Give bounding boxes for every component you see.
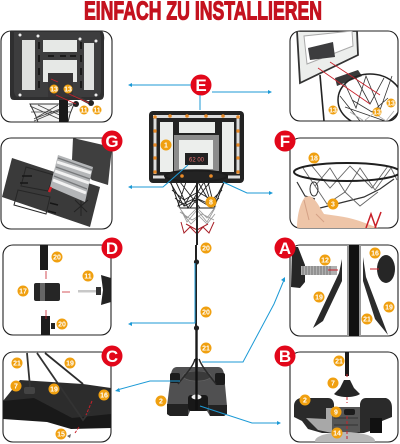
part labels xyxy=(156,140,216,406)
label: parts 21, 7, 2, 9, 14: 7 xyxy=(331,380,335,388)
label: parts 13, 13, 13: 13 xyxy=(373,110,381,116)
part labels: 2 xyxy=(159,398,163,406)
label: parts 13, 13, 13: 13 xyxy=(329,108,337,114)
label: parts 21, 7, 2, 9, 14: 21 xyxy=(335,358,343,366)
label: parts 12, 19, 16, 19, 21: 19 xyxy=(385,304,393,312)
label: parts 21, 7, 2, 9, 14 xyxy=(300,356,344,438)
label: parts 12, 19, 16, 19, 21: 21 xyxy=(363,316,371,324)
label: parts 20, 17, 11, 20: 20 xyxy=(53,254,61,262)
badge B: B xyxy=(279,347,291,366)
panel B: base assembly xyxy=(290,352,398,444)
hoop rim xyxy=(165,170,227,182)
panel: hoop mounting xyxy=(290,31,400,126)
label: parts 13, 13, 11, 11: 13 xyxy=(50,86,58,94)
light strip xyxy=(153,114,240,178)
label: parts 18, 3 xyxy=(308,152,338,210)
panel A: brace bolt xyxy=(290,245,398,336)
part labels: 1 xyxy=(164,142,168,150)
badge F: F xyxy=(280,132,290,151)
panel D: pole connector xyxy=(3,245,111,336)
panel F: net attachment xyxy=(290,138,400,228)
label: parts 13, 13, 11, 11: 11 xyxy=(93,108,101,114)
label: parts 21, 7, 2, 9, 14: 9 xyxy=(334,410,338,416)
label: parts 13, 13, 13: 13 xyxy=(387,100,395,108)
label: parts 20, 17, 11, 20: 11 xyxy=(84,274,92,280)
label: parts 21, 19, 7, 19, 16, 15 xyxy=(10,358,110,440)
panel: backboard rear xyxy=(1,31,112,122)
label: parts 13, 13, 11, 11: 11 xyxy=(80,108,88,114)
label: parts 13, 13, 11, 11: 13 xyxy=(64,86,72,94)
label: parts 21, 19, 7, 19, 16, 15: 15 xyxy=(57,432,65,438)
arrows: callout connectors xyxy=(115,83,285,425)
badge D: D xyxy=(106,239,118,258)
badge D xyxy=(102,238,122,258)
badge E xyxy=(190,74,212,96)
badge F xyxy=(274,130,296,152)
label: parts 12, 19, 16, 19, 21: 19 xyxy=(315,294,323,302)
label: parts 20, 17, 11, 20: 17 xyxy=(19,288,27,296)
badge A xyxy=(274,238,296,258)
label: parts 20, 17, 11, 20: 20 xyxy=(58,322,66,328)
label: parts 12, 19, 16, 19, 21: 12 xyxy=(321,258,329,264)
label: parts 20, 17, 11, 20 xyxy=(18,252,94,330)
part labels: 20 xyxy=(202,310,210,316)
score display: 62 00 xyxy=(189,158,205,164)
label: parts 12, 19, 16, 19, 21 xyxy=(314,248,394,324)
label: parts 12, 19, 16, 19, 21: 16 xyxy=(371,250,379,258)
part labels: 8 xyxy=(209,200,213,206)
label: parts 13, 13, 13 xyxy=(328,98,396,116)
badge G: G xyxy=(105,132,119,151)
panel C: base brace xyxy=(3,352,111,442)
badge G xyxy=(102,130,122,152)
badge E: E xyxy=(195,76,207,95)
score display xyxy=(185,153,208,165)
badge B xyxy=(274,346,296,366)
label: parts 13, 13, 11, 11 xyxy=(50,84,102,114)
label: parts 21, 19, 7, 19, 16, 15: 19 xyxy=(50,386,58,394)
badge C xyxy=(102,346,122,366)
badge A: A xyxy=(279,239,291,258)
label: parts 18, 3: 18 xyxy=(310,156,318,162)
part labels: 20 xyxy=(202,246,210,252)
label: parts 21, 19, 7, 19, 16, 15: 19 xyxy=(66,360,74,368)
label: parts 21, 19, 7, 19, 16, 15: 7 xyxy=(14,384,18,390)
product: basketball stand xyxy=(149,111,244,416)
label: parts 21, 19, 7, 19, 16, 15: 21 xyxy=(13,360,21,368)
label: parts 18, 3: 3 xyxy=(331,202,335,208)
panel G: backboard bracket xyxy=(1,138,112,229)
badge C: C xyxy=(106,347,118,366)
part labels: 21 xyxy=(202,346,210,352)
label: parts 21, 7, 2, 9, 14: 2 xyxy=(303,398,307,404)
label: parts 21, 19, 7, 19, 16, 15: 16 xyxy=(100,392,108,400)
label: parts 21, 7, 2, 9, 14: 14 xyxy=(333,430,341,438)
